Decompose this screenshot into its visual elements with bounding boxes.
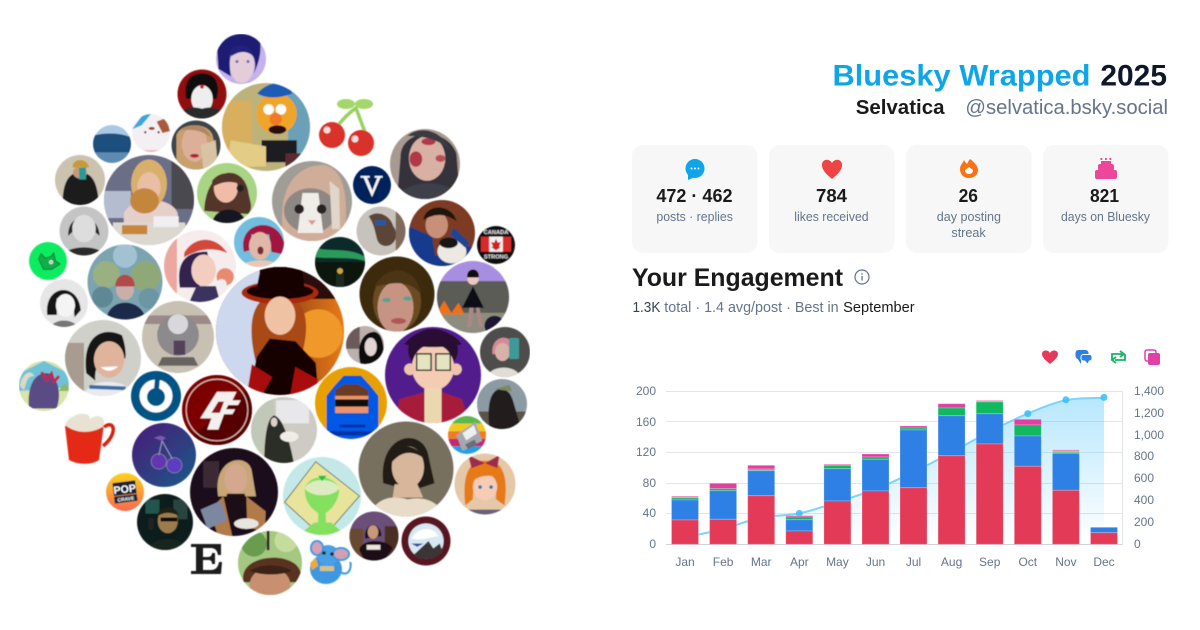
avatar: red haired pixel girl <box>454 454 516 514</box>
avatar: DF logo <box>182 375 252 445</box>
avatar: blonde eating bread <box>104 155 194 245</box>
avatar: blonde with books <box>190 448 278 536</box>
engagement summary: 1.3K <box>632 300 661 316</box>
avatar: blue ring logo <box>131 371 181 421</box>
month labels: Mar <box>751 555 772 569</box>
right axis labels: 1,200 <box>1134 406 1164 420</box>
month labels: Jan <box>675 555 695 569</box>
avatar: pixel art hood <box>315 367 387 439</box>
engagement summary: September <box>843 300 915 316</box>
display name: Selvatica <box>856 96 945 119</box>
avatar: purple rock monster <box>19 361 69 411</box>
bar: Nov <box>1052 450 1079 544</box>
avatar: figure near window <box>251 397 317 463</box>
avatar: Pop Crave logo: CRAVE <box>117 496 135 504</box>
avatar: V logo <box>353 166 391 204</box>
avatar: E logo <box>191 544 222 574</box>
month labels: May <box>826 555 849 569</box>
month labels: Oct <box>1018 555 1038 569</box>
avatar: curly hair under trees <box>238 529 302 603</box>
cumulative line <box>685 398 1104 537</box>
cumulative area <box>685 398 1104 544</box>
avatar cluster <box>19 34 530 603</box>
avatar: person in forest <box>88 244 162 320</box>
left axis labels: 40 <box>643 506 656 520</box>
avatar: neon green creature <box>29 242 67 280</box>
avatar: blue mouse <box>310 541 351 584</box>
right axis labels: 1,400 <box>1134 384 1164 398</box>
right axis labels <box>1134 384 1164 551</box>
icon: legend replies <box>1076 350 1092 364</box>
avatar: red and black ink portrait <box>178 70 226 118</box>
avatar: purple gradient cherries <box>132 423 196 487</box>
avatar: ferret <box>356 206 406 256</box>
avatar: rainbow floppy disk <box>448 416 486 454</box>
avatar: aurora <box>315 237 365 287</box>
bar: May <box>824 464 851 544</box>
left axis labels: 160 <box>636 415 656 429</box>
right axis labels: 600 <box>1134 471 1154 485</box>
heading: Your Engagement: Your Engagement <box>632 265 843 292</box>
avatar: Pop Crave logo: POP <box>113 482 137 497</box>
avatar: cat in headscarf <box>272 161 352 241</box>
bar: Jun <box>862 454 889 544</box>
card: days on Bluesky <box>1043 145 1168 253</box>
avatar: blonde selfie <box>172 120 220 170</box>
icon: red cherries <box>319 99 374 156</box>
card: day posting streak <box>906 145 1032 253</box>
right axis labels: 0 <box>1134 537 1141 551</box>
handle: @selvatica.bsky.social <box>965 96 1168 119</box>
avatar: smiling woman with black hair <box>65 320 141 396</box>
avatar: mirror selfie with yellow hat <box>55 155 105 205</box>
card: posts and replies: posts · replies <box>656 209 733 224</box>
icon: flame <box>960 159 978 178</box>
avatar: Canada strong <box>477 226 515 264</box>
month labels: Dec <box>1093 555 1115 569</box>
bar: Feb <box>710 483 737 544</box>
bar: Jan <box>672 496 698 544</box>
card: likes received: likes received <box>794 209 869 224</box>
avatar: anime girl with red hat <box>164 230 236 302</box>
card: posts and replies: 472 · 462 <box>656 185 732 206</box>
avatar: Canada strong: STRONG <box>484 255 509 261</box>
icon: info <box>855 270 869 284</box>
line points <box>796 394 1108 517</box>
left axis labels: 120 <box>636 445 656 459</box>
avatar: black and white portrait <box>60 206 108 256</box>
avatar: dark horse painting <box>477 379 527 429</box>
month labels: Jun <box>866 555 885 569</box>
bar: Oct <box>1014 419 1041 544</box>
bars <box>672 400 1118 544</box>
engagement bar and line chart <box>636 384 1164 569</box>
icon: legend quotes <box>1145 350 1160 365</box>
avatar: yellow puppet <box>222 83 310 171</box>
icon: legend heart <box>1042 350 1058 364</box>
avatar: gothic figure with fire <box>437 261 509 336</box>
month labels: Aug <box>941 555 962 569</box>
avatar: purple hair portrait <box>216 34 266 84</box>
avatar: lips selfie <box>390 129 460 199</box>
avatar: witch with red hair, main <box>216 267 344 395</box>
card: day posting streak: 26 <box>959 185 978 206</box>
right axis labels: 200 <box>1134 515 1154 529</box>
right axis labels: 800 <box>1134 449 1154 463</box>
title: Bluesky Wrapped <box>832 60 1090 92</box>
icon: red heart mug <box>65 414 113 464</box>
avatar: painted woman <box>358 422 454 516</box>
chart grid <box>666 391 1123 545</box>
card: day posting streak: day posting <box>937 209 1001 224</box>
avatar: expedition patch <box>402 516 450 566</box>
bar: Apr <box>786 516 813 544</box>
avatar: woman in blue with dog <box>409 200 475 266</box>
avatar: white cartoon cat <box>132 114 170 152</box>
avatar: silver ball <box>142 301 214 373</box>
avatar: Pop Crave logo <box>106 473 144 511</box>
card: likes received <box>769 145 894 253</box>
right axis labels: 1,000 <box>1134 428 1164 442</box>
bar: Dec <box>1090 527 1118 544</box>
icon: cake <box>1095 158 1117 179</box>
month labels: Feb <box>713 555 734 569</box>
chart legend <box>1042 350 1160 365</box>
avatar: peridot <box>283 457 361 535</box>
month labels: Nov <box>1055 555 1077 569</box>
left axis labels: 0 <box>649 537 656 551</box>
avatar: woman with brown hair <box>360 256 434 333</box>
title: 2025 <box>1100 60 1167 92</box>
month labels <box>675 555 1115 569</box>
right axis labels: 400 <box>1134 493 1154 507</box>
avatar: red curly hair <box>234 217 284 267</box>
avatar: blue sea <box>93 125 131 163</box>
card: days on Bluesky: 821 <box>1090 185 1119 206</box>
left axis labels: 200 <box>636 384 656 398</box>
icon: chat bubble <box>686 159 704 180</box>
bar: Sep <box>976 400 1003 544</box>
bar: Aug <box>938 404 965 544</box>
card: day posting streak: streak <box>951 225 986 240</box>
bar: Jul <box>900 426 927 544</box>
engagement summary <box>632 300 915 316</box>
left axis labels <box>636 384 656 551</box>
bar: Mar <box>748 465 775 544</box>
left axis labels: 80 <box>643 476 656 490</box>
avatar: dark fringe portrait <box>346 326 384 364</box>
avatar: Canada strong: CANADA <box>484 230 508 236</box>
card: likes received: 784 <box>816 185 848 206</box>
panel: stat cards <box>632 145 1168 253</box>
engagement summary: total · 1.4 avg/post · Best in <box>664 300 839 316</box>
month labels: Jul <box>906 555 921 569</box>
card: posts and replies <box>632 145 758 253</box>
card: days on Bluesky: days on Bluesky <box>1061 209 1150 224</box>
icon: heart <box>822 160 842 179</box>
avatar: pink hair selfie <box>480 327 530 377</box>
avatar: purple cartoon with glasses <box>385 327 481 423</box>
icon: legend repost <box>1112 351 1125 363</box>
avatar: green cartoon girl <box>197 163 257 223</box>
avatar: man with sunglasses <box>137 494 193 550</box>
avatar: woman at Friends couch <box>350 512 398 560</box>
month labels: Apr <box>790 555 809 569</box>
avatar: black and white ink girl <box>40 279 88 327</box>
month labels: Sep <box>979 555 1001 569</box>
